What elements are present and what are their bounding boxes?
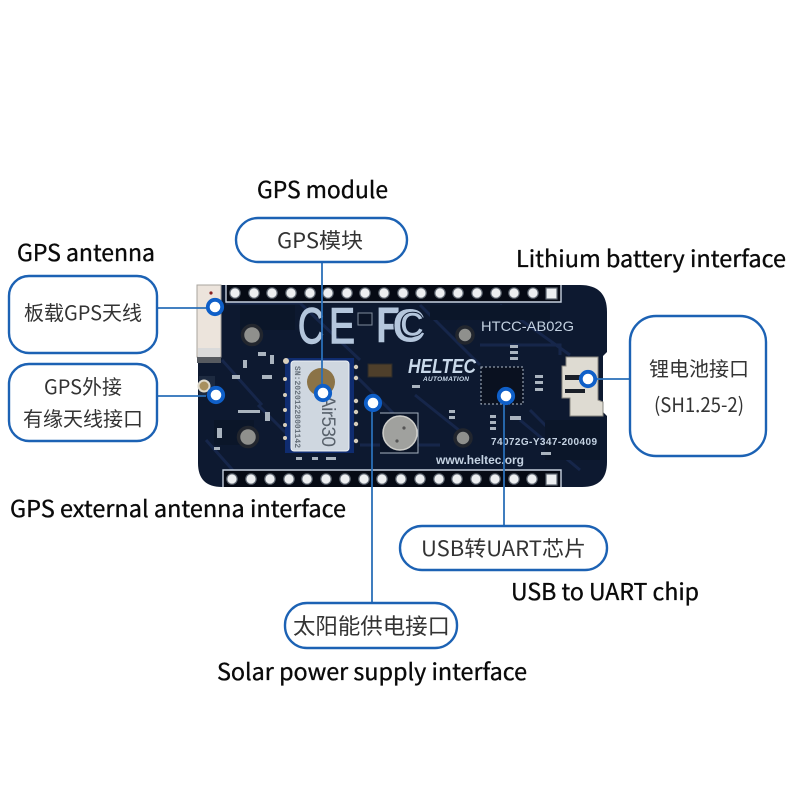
FCC mark: C — [400, 306, 424, 344]
FCC mark: F — [376, 297, 400, 353]
Heltec logo: HELTEC — [408, 356, 476, 378]
callout: lithium battery interface — [630, 316, 766, 456]
website: www.heltec.org — [435, 453, 524, 467]
callout: lithium battery interface: (SH1.25-2) — [654, 389, 744, 418]
FCC mark — [376, 297, 426, 353]
model name: HTCC-AB02G — [481, 318, 574, 334]
board: HTCC-AB02G circuit board — [197, 285, 607, 487]
callout: GPS external antenna: GPS外接 — [44, 371, 122, 400]
callout: solar power supply interface: 太阳能供电接口 — [293, 609, 450, 641]
callout: lithium battery interface: 锂电池接口 — [649, 353, 749, 382]
top pin header — [226, 285, 561, 302]
callout: GPS module — [236, 218, 407, 262]
connector: onboard antenna — [157, 307, 206, 309]
onboard ceramic antenna — [197, 285, 221, 363]
round buzzer — [380, 413, 418, 453]
GPS module Air530 — [283, 358, 358, 453]
USB to UART chip — [481, 367, 523, 404]
marker: external antenna — [209, 388, 223, 402]
GPS module Air530: SN:20201228001142 — [292, 366, 301, 448]
callout: onboard GPS antenna: 板载GPS天线 — [24, 297, 142, 326]
capacitor — [368, 364, 392, 377]
mounting screws — [238, 326, 473, 446]
callout: GPS external antenna: 有缘天线接口 — [23, 403, 143, 432]
callout: solar power supply interface — [285, 603, 457, 648]
heading: USB to UART chip: USB to UART chip — [511, 573, 699, 607]
small pad between logos — [358, 313, 372, 325]
external antenna connector — [198, 376, 215, 396]
CE mark — [298, 298, 355, 354]
heading: solar power supply interface: Solar power supply interface — [217, 653, 527, 687]
heading: GPS antenna: GPS antenna — [17, 234, 155, 268]
FCC mark: C — [392, 300, 426, 353]
connector: solar — [371, 412, 373, 603]
heading: GPS module: GPS module — [257, 171, 388, 205]
heading: lithium battery interface: Lithium battery interface — [516, 240, 786, 274]
board outline — [198, 285, 607, 487]
connector: USB to UART — [503, 404, 505, 526]
callout: GPS external antenna — [9, 364, 157, 441]
callout: onboard GPS antenna — [9, 276, 157, 353]
connector: GPS module — [321, 262, 323, 392]
callout: USB to UART chip: USB转UART芯片 — [421, 533, 586, 563]
CE mark: C — [298, 298, 324, 354]
small surface-mount parts — [214, 345, 551, 460]
serial number: 74072G-Y347-200409 — [491, 437, 597, 448]
CE mark: E — [329, 298, 355, 354]
marker: battery interface — [581, 372, 595, 386]
connector: battery — [597, 378, 630, 380]
connector: external antenna — [157, 395, 206, 397]
Heltec logo: AUTOMATION — [422, 376, 469, 383]
GPS module Air530: Air530 — [317, 395, 338, 447]
marker: USB to UART chip — [499, 389, 513, 403]
marker: GPS module — [316, 386, 330, 400]
callout: USB to UART chip — [400, 526, 607, 570]
heading: GPS external antenna interface: GPS external antenna interface — [10, 490, 346, 524]
lithium battery connector — [562, 357, 603, 416]
marker: onboard antenna — [208, 300, 222, 314]
callout: GPS module: GPS模块 — [277, 225, 363, 255]
marker: solar interface — [366, 396, 380, 410]
bottom pin header — [223, 470, 561, 487]
